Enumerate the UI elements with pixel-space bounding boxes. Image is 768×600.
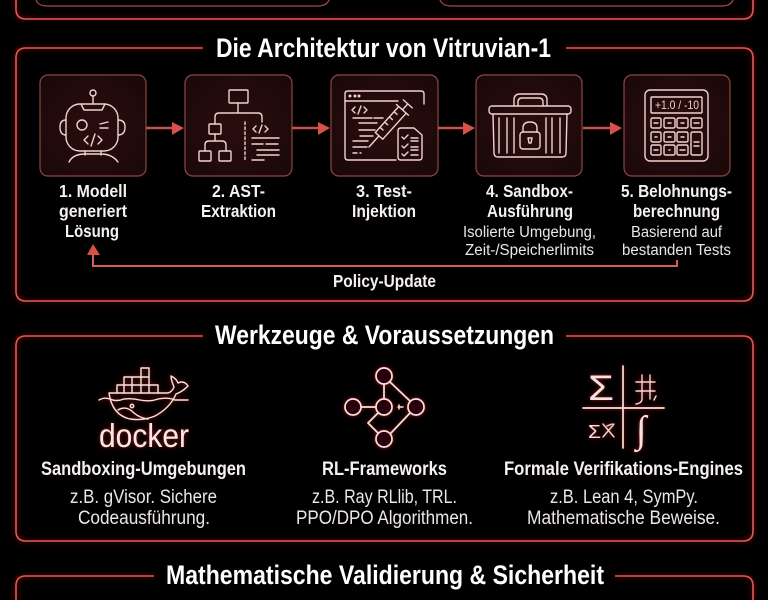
column: RL frameworks bbox=[296, 459, 473, 529]
label: step 1: 1. Modell bbox=[59, 181, 127, 201]
card: step 2 AST icon bbox=[185, 75, 292, 176]
arrow: step 2 to 3 bbox=[292, 122, 330, 135]
heading: architecture: Die Architektur von Vitruvian-1 bbox=[216, 33, 551, 63]
label: step 1: Lösung bbox=[65, 221, 119, 241]
panel: architecture frame bbox=[16, 48, 753, 301]
column: formal verification engines: z.B. Lean 4, SymPy. bbox=[550, 487, 698, 508]
arrow: step 1 to 2 bbox=[146, 122, 184, 135]
icon: formal verification math symbols: Σ bbox=[588, 369, 614, 408]
card: step 5 calculator icon: +1.0 / -10 bbox=[655, 98, 699, 112]
arrow: step 3 to 4 bbox=[438, 122, 475, 135]
column: formal verification engines bbox=[504, 459, 743, 529]
card: step 4 sandbox toolbox icon bbox=[476, 75, 582, 176]
label: step 4 bbox=[463, 181, 596, 259]
label: step 2 bbox=[201, 181, 276, 221]
icon: formal verification math symbols: Σ bbox=[588, 422, 601, 442]
label: step 2: 2. AST- bbox=[212, 181, 265, 201]
label: step 4: Ausführung bbox=[487, 201, 573, 221]
column: sandboxing environments: Sandboxing-Umgebungen bbox=[41, 459, 246, 480]
panel: tools frame bbox=[16, 336, 753, 541]
label: step 3: Injektion bbox=[352, 201, 416, 221]
label: step 5 bbox=[621, 181, 732, 259]
column: sandboxing environments: z.B. gVisor. Sichere bbox=[70, 487, 217, 508]
label: step 4: Isolierte Umgebung, bbox=[463, 224, 596, 241]
label: policy update: Policy-Update bbox=[333, 271, 436, 291]
label: step 5: Basierend auf bbox=[631, 224, 723, 241]
column: sandboxing environments bbox=[41, 459, 246, 529]
label: step 4: 4. Sandbox- bbox=[486, 181, 573, 201]
column: RL frameworks: PPO/DPO Algorithmen. bbox=[296, 508, 473, 529]
label: step 5: bestanden Tests bbox=[622, 242, 731, 259]
column: RL frameworks: RL-Frameworks bbox=[322, 459, 447, 480]
column: RL frameworks: z.B. Ray RLlib, TRL. bbox=[312, 487, 457, 508]
heading: validation and security: Mathematische Validierung & Sicherheit bbox=[166, 560, 604, 590]
label: step 4: Zeit-/Speicherlimits bbox=[465, 242, 594, 259]
label: step 1 bbox=[59, 181, 127, 241]
inner card left bbox=[35, 0, 330, 6]
card: step 1 robot icon bbox=[40, 75, 146, 176]
icon: RL framework graph bbox=[345, 368, 424, 447]
icon: docker whale logo: docker bbox=[99, 417, 189, 454]
icon: formal verification math symbols: ∫ bbox=[634, 409, 649, 453]
column: formal verification engines: Mathematische Beweise. bbox=[527, 508, 720, 529]
card: step 5 calculator icon bbox=[624, 75, 730, 176]
panel: previous section (cut off at top) bbox=[16, 0, 753, 19]
label: step 5: 5. Belohnungs- bbox=[621, 181, 732, 201]
icon: formal verification math symbols bbox=[583, 366, 664, 453]
column: sandboxing environments: Codeausführung. bbox=[78, 508, 210, 529]
card: step 3 test injection icon bbox=[331, 75, 438, 176]
label: step 1: generiert bbox=[59, 201, 127, 221]
label: step 5: berechnung bbox=[633, 201, 720, 221]
arrow: step 4 to 5 bbox=[583, 122, 622, 135]
icon: docker whale logo bbox=[99, 368, 189, 454]
inner card right bbox=[439, 0, 734, 6]
label: step 3: 3. Test- bbox=[356, 181, 412, 201]
arrow: policy-update feedback loop bbox=[87, 244, 677, 266]
heading: tools: Werkzeuge & Voraussetzungen bbox=[215, 320, 554, 350]
label: step 2: Extraktion bbox=[201, 201, 276, 221]
panel: validation frame (cut off at bottom) bbox=[16, 576, 753, 600]
label: step 3 bbox=[352, 181, 416, 221]
